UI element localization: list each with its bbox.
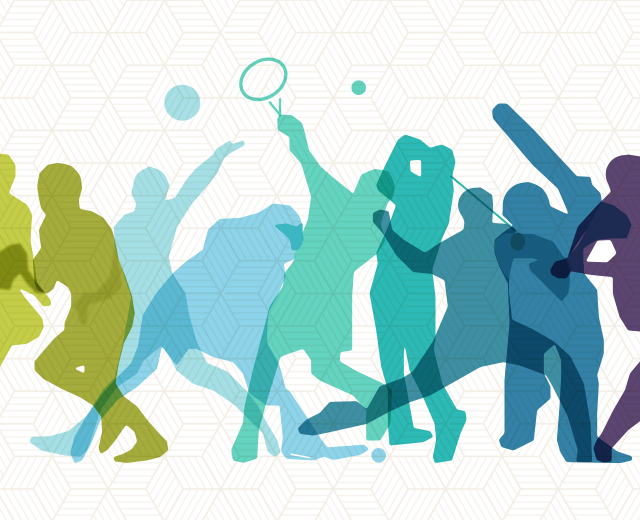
glove (550, 258, 571, 278)
figure: pale blue thrower (30, 141, 280, 457)
figure: mint tennis player (232, 115, 395, 462)
figure: yellow-green player at far left (0, 154, 51, 375)
purple player's legs (593, 352, 640, 463)
figure: teal golfer (370, 135, 466, 463)
icon: pale blue ball (164, 85, 200, 121)
pitcher's dark hand (510, 233, 525, 251)
figure: olive rugby player (33, 163, 168, 462)
olive player's darker arm (72, 243, 122, 325)
hockey stick (283, 387, 369, 460)
thrower's head (133, 168, 168, 202)
golf club shaft (451, 176, 517, 232)
figure: sky blue hockey player with stick (71, 204, 369, 463)
batsman's helmet (503, 182, 549, 229)
purple player's head (606, 155, 640, 194)
icon: blue hockey ball (371, 448, 386, 463)
pitcher's head (458, 188, 493, 222)
olive player's head (38, 163, 82, 205)
tennis player's head (357, 170, 395, 207)
navy arm overlap with gloves (550, 202, 632, 278)
hockey player's helmet (257, 204, 302, 249)
hockey player's teal face strap (273, 222, 303, 251)
yellow player's dark forearm (0, 243, 45, 293)
tennis racket (233, 51, 293, 115)
skate blade highlight (291, 453, 310, 458)
icon: mint tennis ball (351, 80, 366, 95)
figure: blue cricket batsman with bat (493, 104, 632, 463)
figure: purple player at far right (568, 155, 640, 463)
white gap between purple arms (586, 240, 617, 262)
batsman's darker arm (495, 233, 570, 302)
figure: petrol blue pitcher (298, 188, 592, 462)
